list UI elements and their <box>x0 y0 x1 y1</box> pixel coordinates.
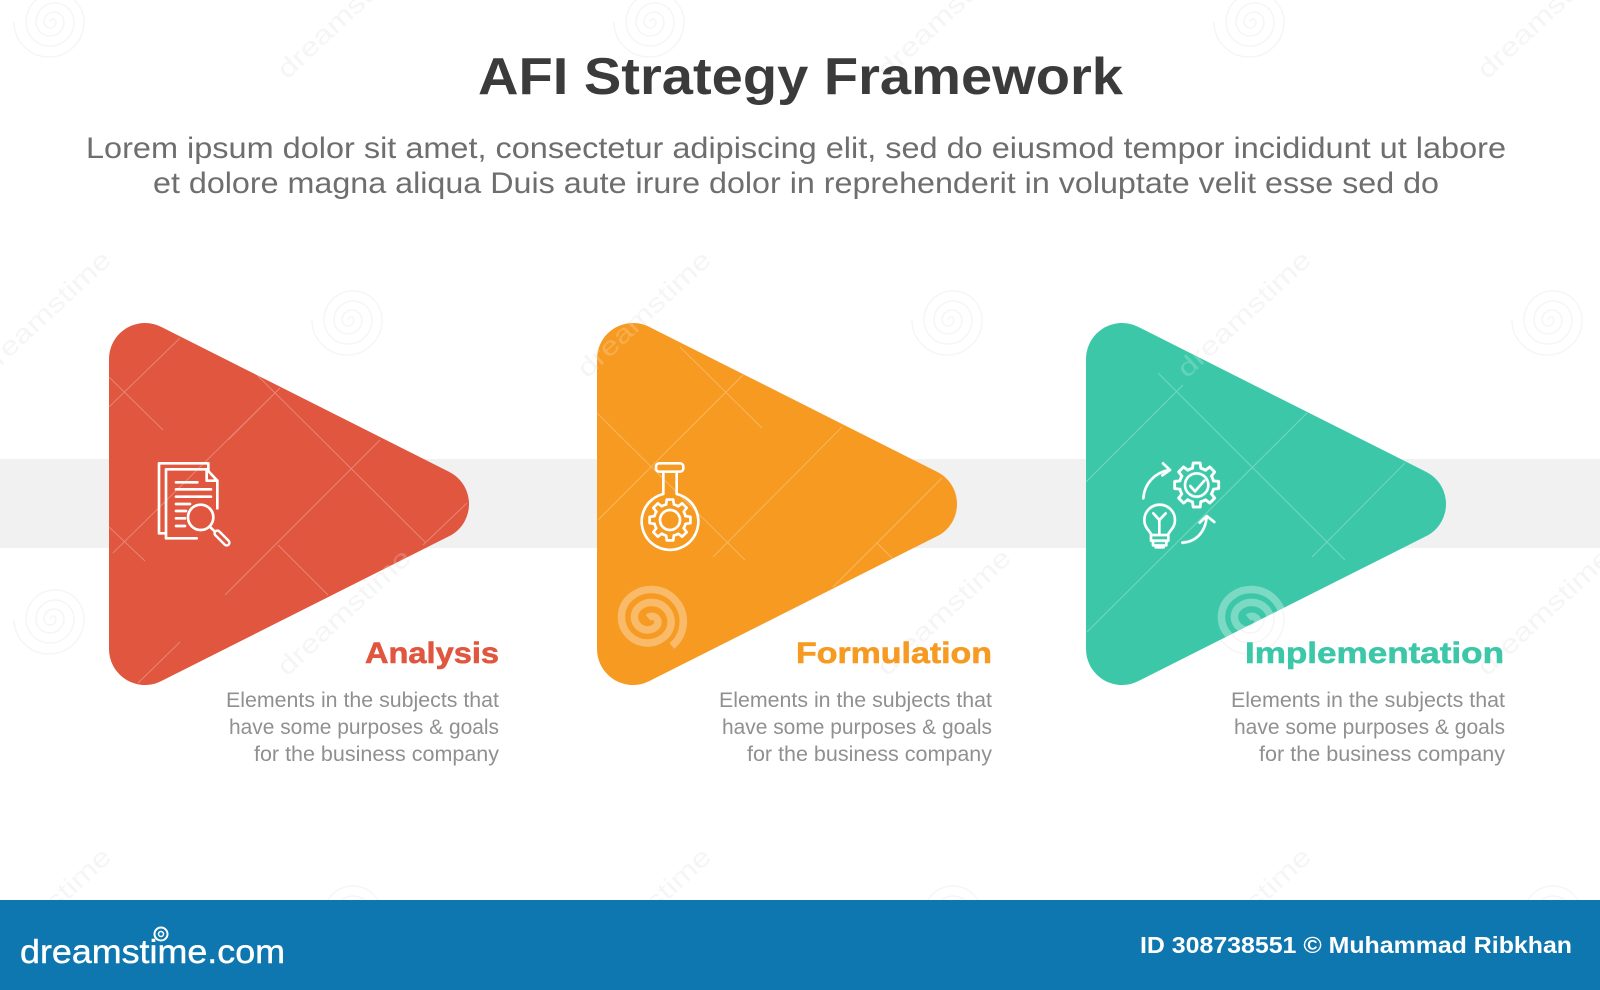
triangle: implementation <box>1122 359 1410 649</box>
subtitle text block <box>86 132 1506 200</box>
footer credit: ID 308738551 © Muhammad Ribkhan <box>1140 932 1572 958</box>
panel: formulation <box>633 359 993 766</box>
icon: flask with gear <box>642 463 698 550</box>
description: formulation: Elements in the subjects that <box>719 689 992 712</box>
heading: analysis: Analysis <box>365 637 499 670</box>
heading: formulation: Formulation <box>796 637 992 670</box>
description: analysis: for the business company <box>254 743 500 766</box>
description: formulation: for the business company <box>747 743 993 766</box>
watermark background: dreamstime <box>871 542 1017 681</box>
panel: implementation <box>1122 359 1506 766</box>
watermark overlay on triangles: dreamstime <box>571 244 717 383</box>
watermark background: dreamstime <box>571 841 717 980</box>
icon: document with magnifier <box>159 463 227 543</box>
panel: analysis <box>145 359 500 766</box>
heading: implementation: Implementation <box>1245 637 1504 670</box>
description: analysis: have some purposes & goals <box>229 716 499 739</box>
triangle: analysis <box>145 359 433 649</box>
subtitle text block: et dolore magna aliqua Duis aute irure dolor in reprehenderit in voluptate velit esse sed do <box>153 167 1439 200</box>
footer bar <box>0 900 1600 990</box>
description: implementation: Elements in the subjects that <box>1231 689 1505 712</box>
description: analysis <box>226 689 500 766</box>
description: implementation <box>1231 689 1506 766</box>
watermark overlay on triangles: dreamstime <box>271 542 417 681</box>
triangle: formulation <box>633 359 921 649</box>
watermark overlay on triangles <box>109 323 1406 684</box>
watermark background: dreamstime <box>271 542 417 681</box>
description: formulation <box>719 689 993 766</box>
watermark background: dreamstime <box>1171 841 1317 980</box>
title: AFI Strategy Framework <box>478 48 1123 106</box>
description: implementation: for the business company <box>1259 743 1506 766</box>
watermark overlay on triangles: dreamstime <box>1171 244 1317 383</box>
icon: idea, gear and cycle arrows <box>1143 463 1219 547</box>
description: implementation: have some purposes & goals <box>1234 716 1505 739</box>
footer logo: dreamstime.com <box>20 933 285 970</box>
subtitle text block: Lorem ipsum dolor sit amet, consectetur adipiscing elit, sed do eiusmod tempor incididunt ut labore <box>86 132 1506 165</box>
watermark background: dreamstime <box>1171 244 1317 383</box>
horizontal timeline band <box>0 459 1600 548</box>
description: analysis: Elements in the subjects that <box>226 689 499 712</box>
description: formulation: have some purposes & goals <box>722 716 992 739</box>
watermark background: dreamstime <box>1471 542 1600 681</box>
watermark background: dreamstime <box>571 244 717 383</box>
